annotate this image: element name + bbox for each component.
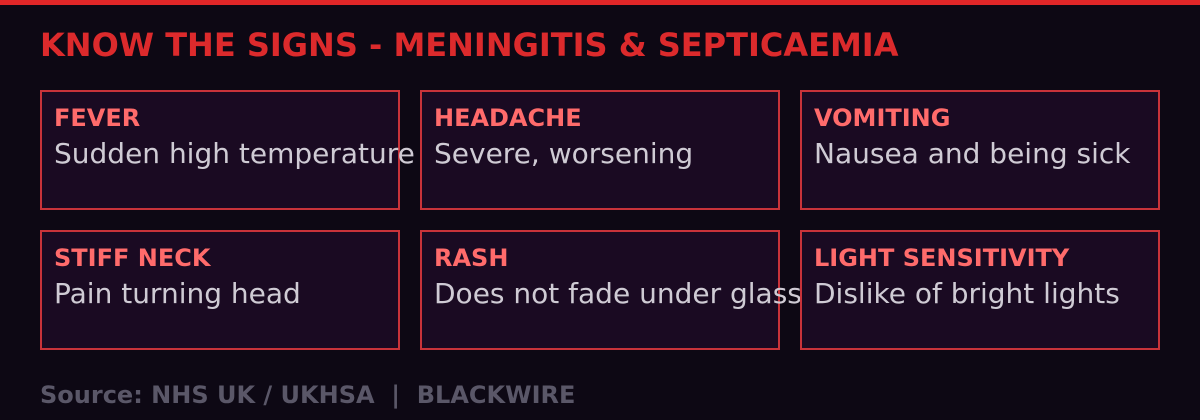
panel: stiff neck: [40, 230, 400, 350]
panel: light sensitivity: Dislike of bright lights: [814, 277, 1120, 310]
panel: rash: RASH: [434, 244, 508, 272]
panel: fever: FEVER: [54, 104, 140, 132]
panel: fever: [40, 90, 400, 210]
panel: light sensitivity: [800, 230, 1160, 350]
source footer: Source: NHS UK / UKHSA | BLACKWIRE: [40, 381, 575, 409]
panel: vomiting: Nausea and being sick: [814, 137, 1130, 170]
panel: vomiting: [800, 90, 1160, 210]
title: KNOW THE SIGNS - MENINGITIS & SEPTICAEMIA: [40, 26, 898, 64]
panel: headache: Severe, worsening: [434, 137, 693, 170]
panel: rash: [420, 230, 780, 350]
panel: rash: Does not fade under glass: [434, 277, 802, 310]
panel: stiff neck: Pain turning head: [54, 277, 301, 310]
panel: vomiting: VOMITING: [814, 104, 950, 132]
panel: light sensitivity: LIGHT SENSITIVITY: [814, 244, 1069, 272]
panel: stiff neck: STIFF NECK: [54, 244, 210, 272]
panel: headache: [420, 90, 780, 210]
panel: headache: HEADACHE: [434, 104, 582, 132]
panel: fever: Sudden high temperature: [54, 137, 415, 170]
